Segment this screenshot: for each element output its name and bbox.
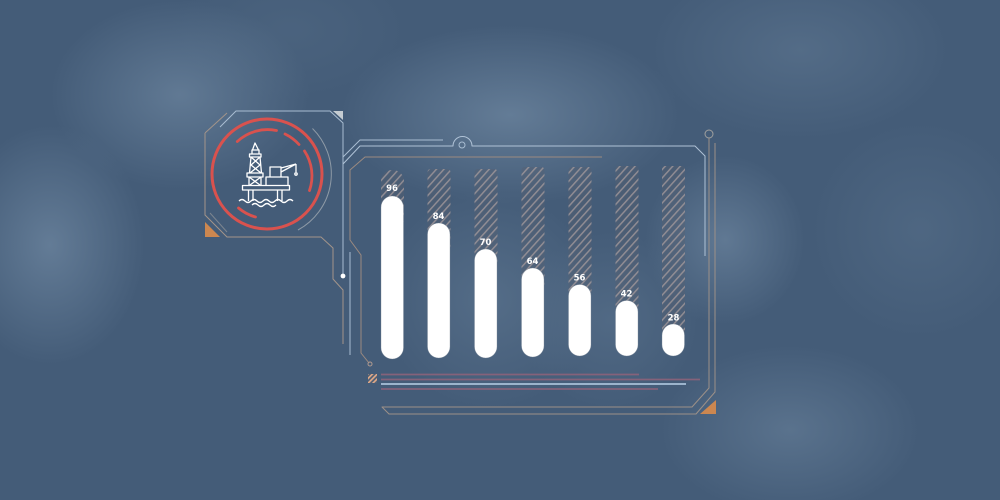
- bar 42: [616, 166, 638, 356]
- bar 84: 84: [433, 212, 444, 222]
- bar 64: 64: [527, 257, 538, 267]
- bar 56: [568, 167, 592, 356]
- connector dot: [341, 274, 345, 278]
- bar 56: 56: [574, 274, 585, 284]
- icon: offshore oil rig: [239, 143, 297, 206]
- chart corner marker: [700, 400, 716, 414]
- footer lines: [381, 374, 700, 389]
- frame: icon panel outline: [205, 111, 343, 344]
- bar 28: 28: [668, 314, 679, 324]
- bar 70: 70: [480, 238, 491, 248]
- bar 96: [381, 170, 404, 359]
- bar 84: [428, 169, 450, 358]
- bar chart: [381, 166, 685, 359]
- bar 28: [662, 166, 685, 356]
- bar 70: [474, 169, 498, 358]
- bar 96: 96: [386, 184, 398, 194]
- bar 42: 42: [621, 290, 632, 300]
- bar 64: [522, 167, 544, 357]
- icon panel corner markers: [205, 111, 343, 237]
- gauge rings around icon: [212, 119, 331, 230]
- chart frame lines: [343, 130, 715, 414]
- hatched square marker: [368, 374, 377, 383]
